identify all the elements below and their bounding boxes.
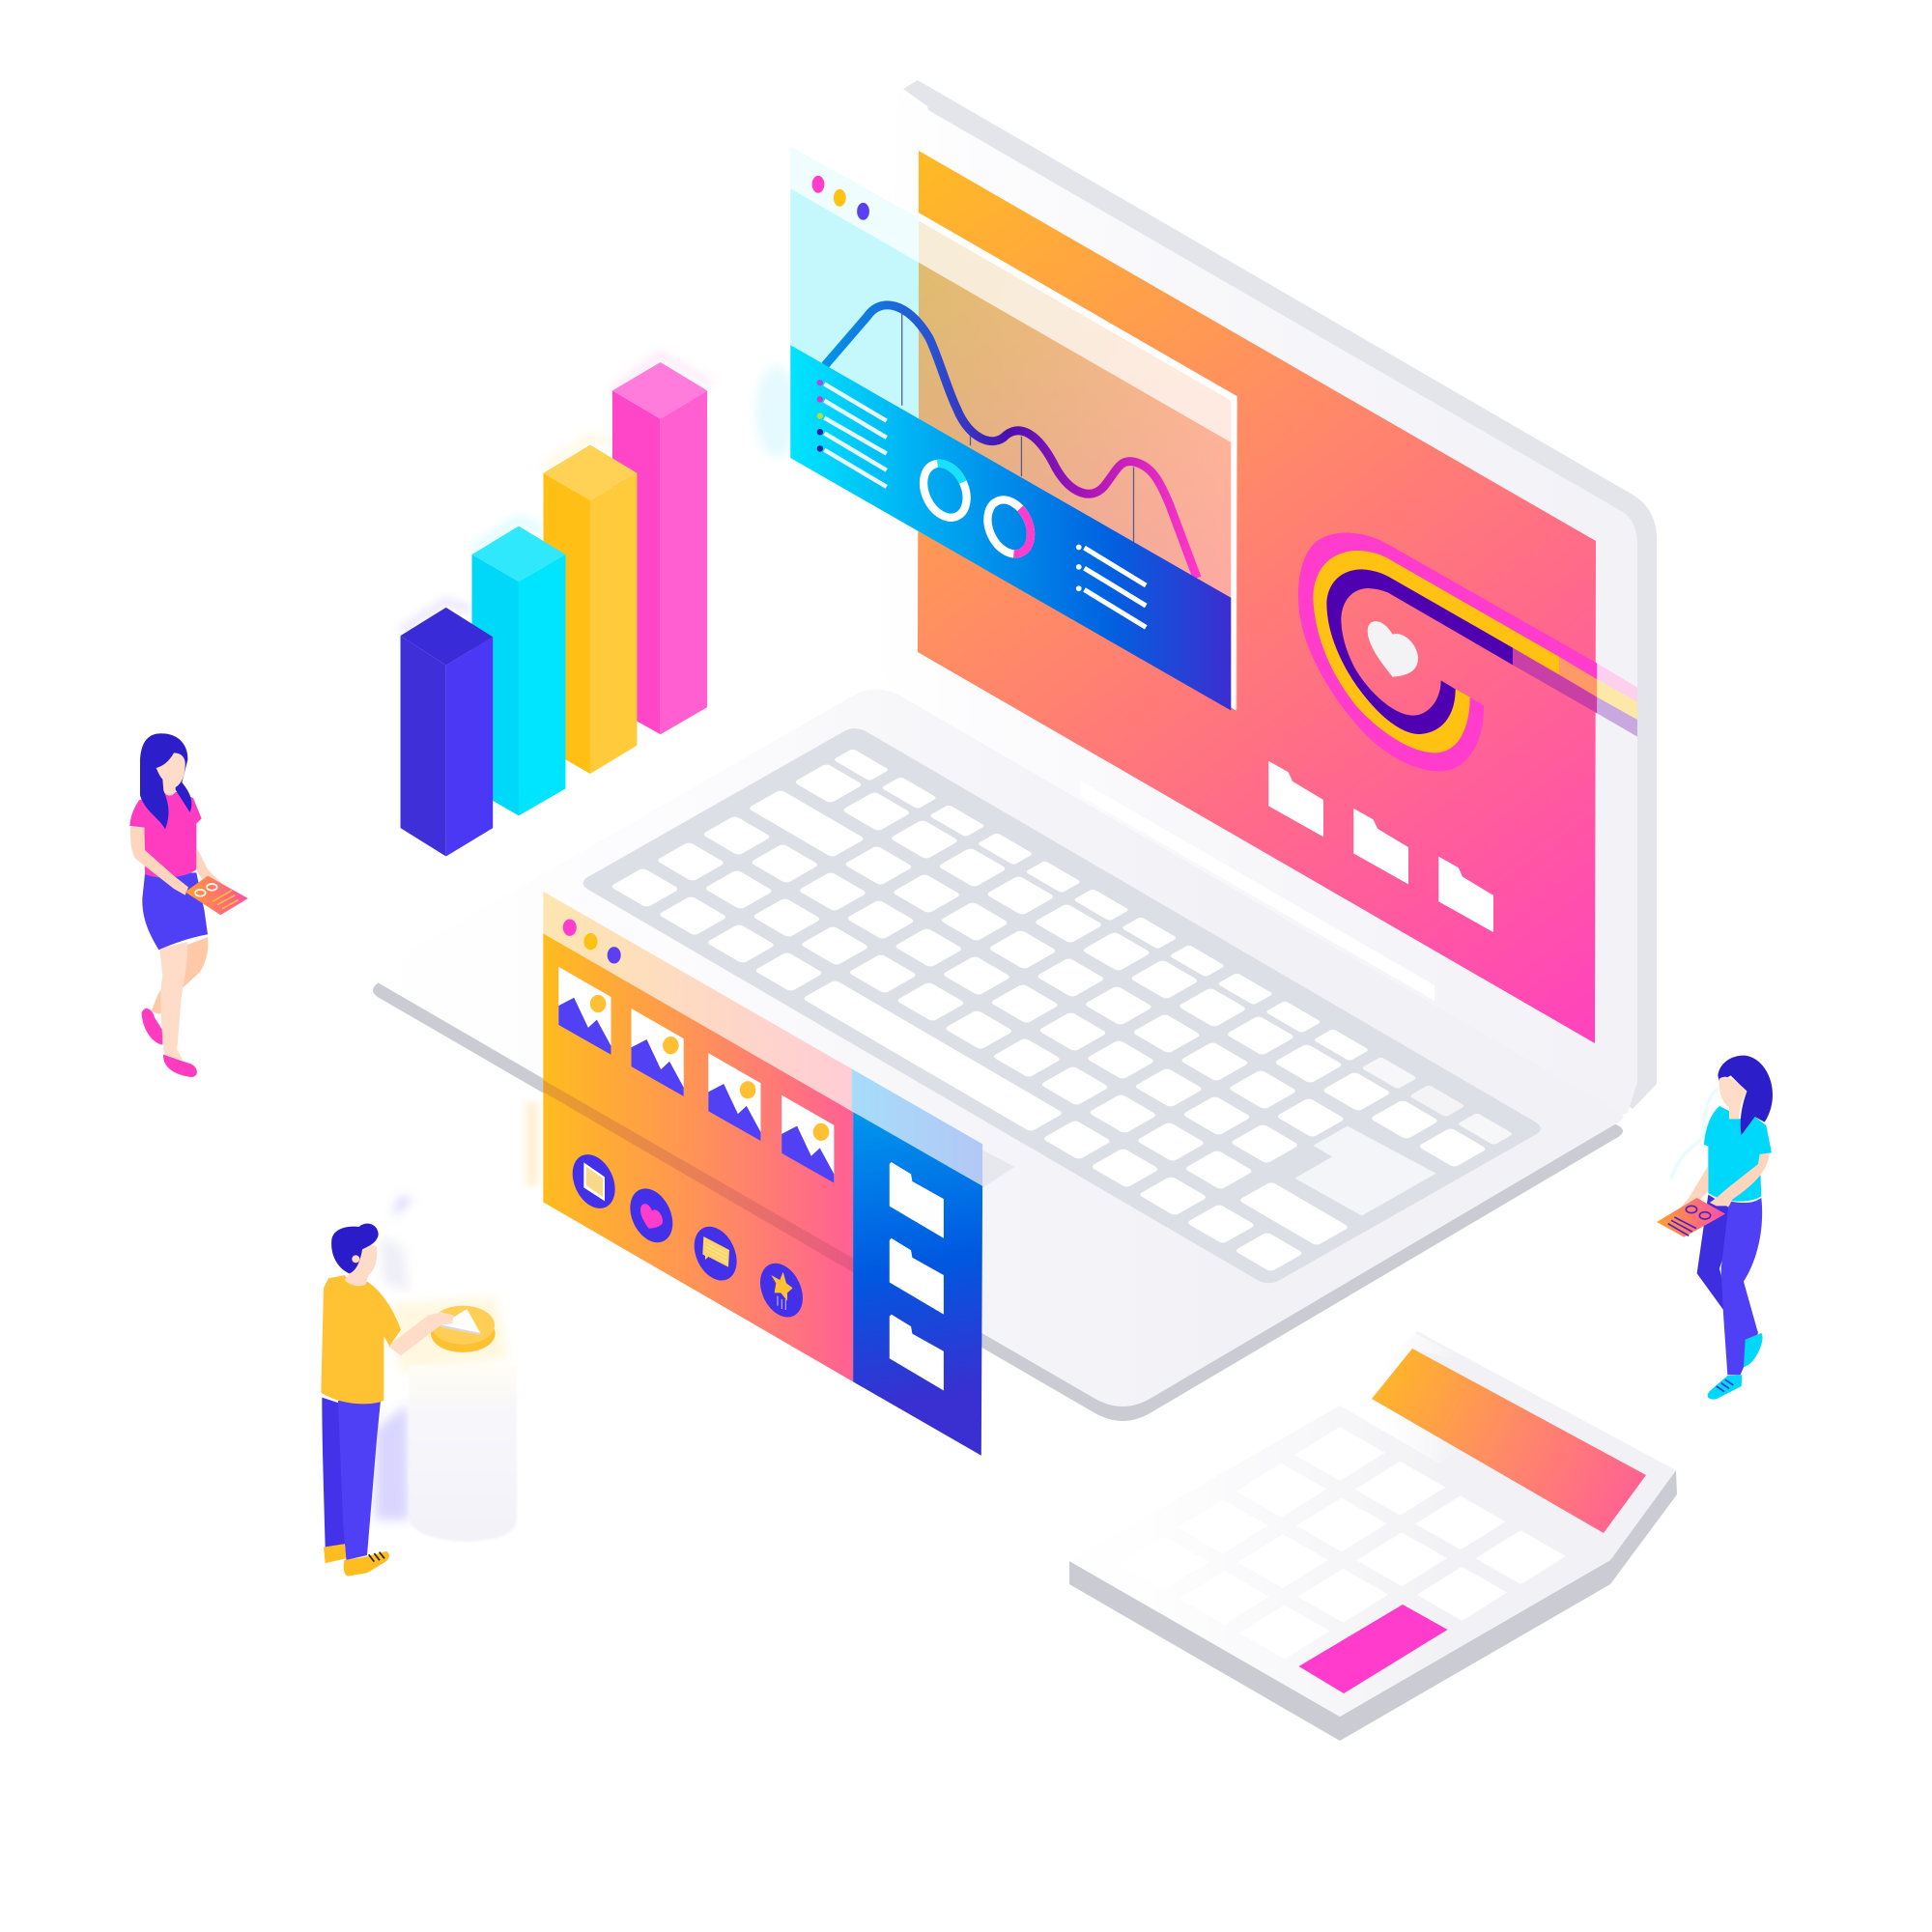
icon: message badge: [686, 1220, 745, 1288]
ear: [352, 1255, 359, 1263]
bar pink: [612, 362, 707, 734]
lid outer edge: [903, 80, 1657, 1109]
hair: [140, 733, 191, 829]
window control dots: [812, 176, 869, 220]
icon: heart badge: [622, 1181, 681, 1249]
screen folders: [1268, 761, 1493, 932]
list lines left: [817, 380, 887, 487]
face: [1719, 1077, 1747, 1119]
front pant leg: [338, 1401, 381, 1560]
front pant leg: [1721, 1198, 1762, 1375]
icon: heart: [1368, 621, 1418, 677]
list lines right: [1076, 545, 1146, 627]
person: woman with cyan shirt: [1657, 1056, 1773, 1400]
panel badges row: [564, 1148, 810, 1324]
cyan wisp: [1671, 1089, 1718, 1179]
ghost pedestal: [409, 1365, 517, 1542]
window glass left: [790, 147, 919, 532]
ring pink band: [1298, 533, 1597, 771]
folder 2: [890, 1238, 944, 1315]
ring heart widget: [1298, 533, 1637, 771]
panel header: [543, 892, 982, 1186]
white right border: [919, 213, 1237, 710]
window header: [790, 147, 1237, 442]
front shoe: [1708, 1375, 1742, 1400]
bar cyan: [472, 526, 565, 815]
hair: [331, 1224, 379, 1273]
left warm glow: [526, 1102, 538, 1186]
window glass right: [919, 218, 1237, 710]
donut chart cyan: [915, 457, 975, 525]
hair: [1718, 1056, 1773, 1135]
image tile 3: [708, 1053, 760, 1141]
face: [345, 1243, 377, 1286]
shirt: [321, 1275, 401, 1404]
lid face: [876, 93, 1637, 1121]
hinge highlight: [1080, 781, 1435, 1001]
bar glow: [401, 355, 712, 631]
person: woman with pink shirt: [129, 733, 248, 1077]
base side edge: [373, 703, 1623, 1421]
shirt: [1704, 1106, 1772, 1202]
laptop screen: [918, 151, 1637, 1043]
back shoe: [324, 1544, 346, 1563]
person: man with pie chart: [321, 1198, 517, 1577]
ring yellow band: [1313, 551, 1559, 753]
laptop base: [373, 690, 1623, 1421]
front leg: [159, 942, 187, 1061]
keys: [611, 749, 1514, 1272]
bar purple: [401, 608, 493, 856]
arms: [1679, 1153, 1770, 1209]
panel main: [543, 933, 853, 1381]
tray shadow peek: [982, 1150, 1014, 1188]
image tile 1: [558, 967, 611, 1055]
folder 1: [890, 1162, 944, 1238]
icon: document badge: [564, 1148, 623, 1215]
front shoe: [163, 1055, 197, 1077]
skirt: [142, 872, 208, 950]
keyboard tray: [577, 725, 1547, 1287]
tablet: [1657, 1198, 1725, 1237]
calculator: [1069, 1325, 1677, 1741]
shirt: [129, 792, 202, 878]
calculator keys: [1119, 1427, 1566, 1693]
back shoe: [1744, 1333, 1763, 1367]
arm: [388, 1312, 454, 1355]
back shoe: [142, 1009, 162, 1045]
donut chart magenta: [980, 493, 1039, 561]
tablet: [185, 876, 248, 915]
base top face: [373, 690, 1623, 1406]
bar yellow: [543, 444, 637, 774]
soft shadows: [375, 1198, 509, 1520]
front window panel: [526, 892, 1014, 1456]
3D bar chart: [401, 355, 712, 856]
image tile 4: [781, 1095, 834, 1183]
calculator display: [1372, 1349, 1646, 1533]
keyboard: [577, 725, 1547, 1287]
arms: [130, 827, 224, 895]
back leg: [152, 937, 208, 1014]
enter key: [1275, 1123, 1436, 1216]
laptop lid: [876, 80, 1657, 1121]
calculator upper fade: [1340, 1325, 1478, 1463]
ring purple band: [1326, 569, 1513, 734]
calculator face: [1069, 1331, 1676, 1717]
calculator side: [1069, 1470, 1677, 1741]
back pant leg: [322, 1398, 345, 1548]
front shoe: [344, 1551, 389, 1577]
faint cyan glow: [756, 365, 798, 458]
screen gradient panel: [918, 151, 1596, 1043]
line chart: [825, 305, 1197, 578]
image tile 2: [632, 1009, 684, 1096]
pie chart: [431, 1306, 496, 1352]
calculator pink key: [1298, 1605, 1447, 1693]
folder 3: [890, 1315, 944, 1391]
see-through base edge: [543, 1080, 853, 1272]
face: [156, 753, 185, 796]
icon: star badge: [752, 1257, 810, 1324]
side column: [853, 1112, 982, 1456]
floating chart window: [756, 147, 1237, 710]
blue info band: [790, 345, 1231, 710]
ring translucent tails: [1513, 648, 1637, 737]
window control dots: [563, 919, 621, 964]
back pant leg: [1697, 1195, 1758, 1340]
